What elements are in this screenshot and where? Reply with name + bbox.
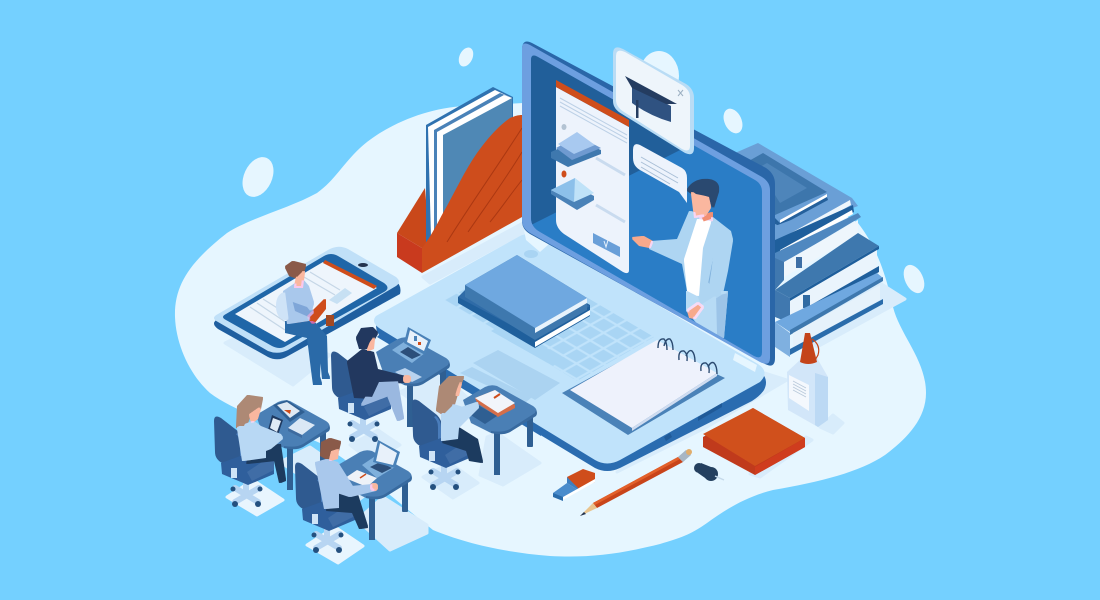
- book files in holder: [426, 87, 513, 242]
- student group: front right: [412, 377, 537, 490]
- chair: [214, 417, 274, 507]
- student: [437, 377, 482, 462]
- student group: back centre: [331, 327, 450, 442]
- laptop book: [458, 255, 590, 348]
- student: [237, 396, 285, 482]
- background blob: [175, 103, 926, 556]
- graduation cap card: [613, 47, 694, 154]
- speech bubble: [633, 144, 687, 203]
- submit button: [593, 233, 620, 257]
- form card: [551, 80, 629, 273]
- glue bottle: [787, 333, 828, 427]
- magazine holder: [397, 87, 522, 273]
- chair floor mats: [227, 480, 363, 563]
- trackpad: [473, 350, 560, 400]
- red box: [703, 408, 805, 475]
- student group: front left: [295, 439, 412, 553]
- pencil: [580, 449, 692, 516]
- laptop: [392, 327, 431, 363]
- push pin: [694, 463, 724, 481]
- eraser: [553, 469, 595, 501]
- open book: [466, 390, 515, 424]
- book stack: [735, 143, 883, 357]
- student on tablet: [277, 262, 333, 384]
- student: [348, 328, 410, 420]
- laptop base: [374, 234, 766, 471]
- student: [316, 439, 377, 528]
- laptop and notes: [345, 440, 400, 487]
- mini book two: [551, 178, 594, 210]
- mini book one: [551, 132, 601, 167]
- teacher: [633, 180, 732, 337]
- desk: [256, 400, 330, 490]
- graduation cap: [625, 76, 677, 122]
- keyboard: [443, 258, 654, 381]
- tablet: [214, 247, 400, 359]
- laptop screen: [522, 42, 775, 372]
- student group: back left: [214, 396, 330, 507]
- screen display: [531, 56, 762, 358]
- floor shadows: [225, 222, 905, 550]
- decorative floating drops: [236, 45, 928, 296]
- spiral notebook: [562, 339, 725, 435]
- tablet device and papers: [268, 400, 315, 438]
- laptop edge behind desks: [377, 333, 541, 436]
